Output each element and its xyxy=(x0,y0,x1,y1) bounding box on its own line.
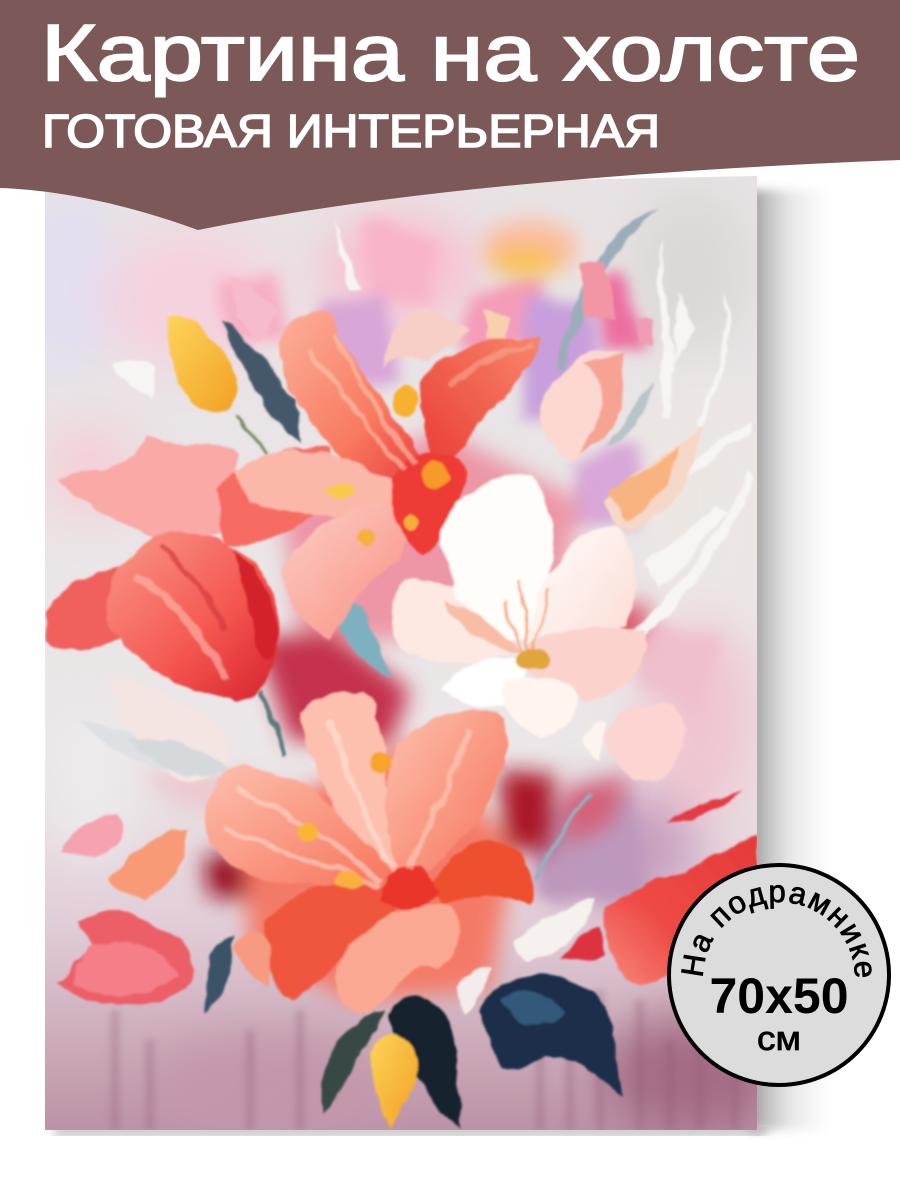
vertical drips xyxy=(115,990,735,1130)
flower: pink bud xyxy=(540,351,703,530)
flower: yellow bud xyxy=(168,317,237,414)
flower: lower lily xyxy=(205,692,534,1015)
dark leaves at the bottom xyxy=(322,900,622,1130)
badge dimensions: 70x50 xyxy=(709,968,849,1024)
petal: bottom right red xyxy=(560,788,757,985)
flower: left red tulip xyxy=(45,530,280,700)
flower: bottom yellow bud xyxy=(371,1036,416,1128)
header banner xyxy=(0,0,900,230)
flower underlay masses xyxy=(140,430,650,1000)
subtitle: ГОТОВАЯ ИНТЕРЬЕРНАЯ xyxy=(42,105,660,157)
badge unit: см xyxy=(757,1020,801,1058)
flower: pale right petal xyxy=(585,702,683,784)
background washes xyxy=(25,190,780,1135)
icon: orange bloom at top xyxy=(482,220,578,276)
painted flower shapes xyxy=(45,207,757,1130)
size badge xyxy=(667,863,891,1087)
stems and grey leaves xyxy=(80,207,660,1010)
petals: bottom left pink xyxy=(55,815,193,1005)
flower: top left pink petals xyxy=(58,438,330,546)
flower: white lily xyxy=(390,474,645,737)
badge arc label: На подрамнике xyxy=(681,884,872,978)
white impasto strokes xyxy=(112,220,755,655)
title: Картина на холсте xyxy=(41,8,860,97)
flower: top lily xyxy=(235,311,540,640)
canvas shadow xyxy=(54,190,830,1135)
canvas painting xyxy=(25,176,780,1135)
flower: white grey leaf lower left xyxy=(105,680,232,783)
